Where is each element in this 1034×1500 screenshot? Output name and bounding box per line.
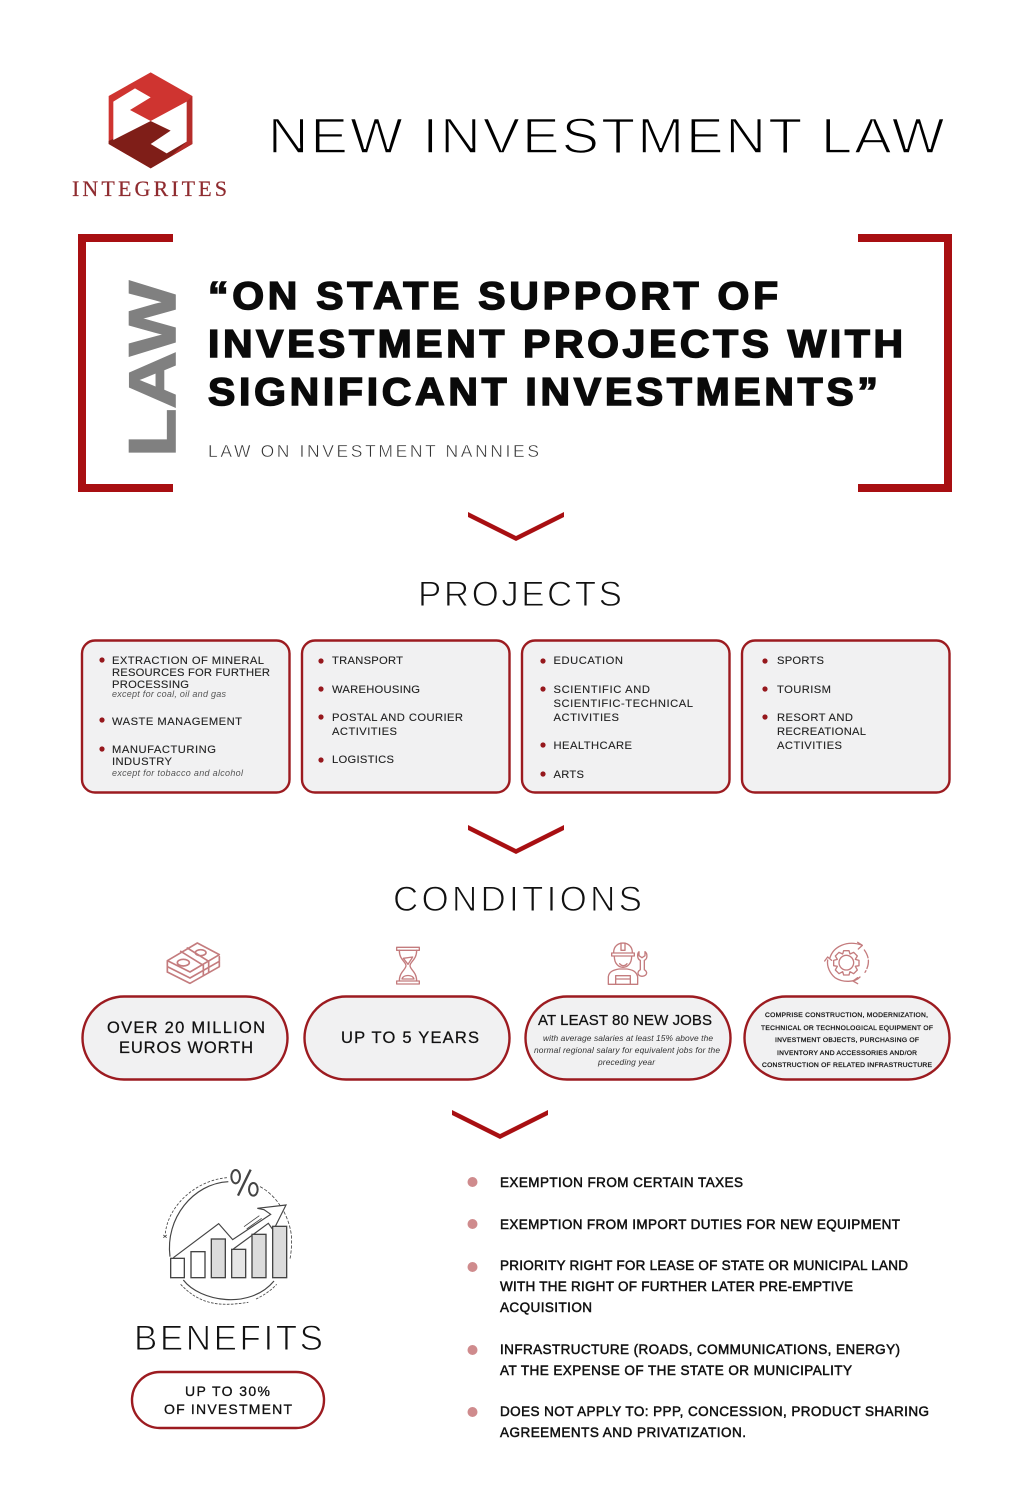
panel: projects card 3: ACTIVITIES xyxy=(554,712,619,724)
arrow: chevron to benefits xyxy=(452,1110,548,1139)
left bracket xyxy=(78,234,173,492)
panel: projects card 2: LOGISTICS xyxy=(332,754,394,766)
heading: conditions: CONDITIONS xyxy=(393,880,642,919)
panel: projects card 4 xyxy=(742,640,950,792)
panel: condition new jobs: normal regional salary for equivalent jobs for the xyxy=(534,1045,720,1055)
panel: projects card 4: TOURISM xyxy=(777,684,831,696)
panel: projects card 2: WAREHOUSING xyxy=(332,684,420,696)
law subtitle: LAW ON INVESTMENT NANNIES xyxy=(208,441,539,461)
panel: projects card 1: WASTE MANAGEMENT xyxy=(112,716,242,728)
panel: condition new jobs xyxy=(526,996,730,1080)
panel: projects card 3 xyxy=(522,640,730,792)
panel: condition duration: UP TO 5 YEARS xyxy=(341,1029,479,1047)
logo wordmark: INTEGRITES xyxy=(72,176,227,201)
panel: projects card 4: RESORT AND xyxy=(777,712,853,724)
panel: projects card 1: INDUSTRY xyxy=(112,756,173,768)
benefit: tax exemption: EXEMPTION FROM CERTAIN TAXES xyxy=(500,1175,743,1190)
law heading xyxy=(208,275,903,414)
heading: benefits: BENEFITS xyxy=(134,1319,323,1358)
benefit: land lease priority: ACQUISITION xyxy=(500,1300,592,1315)
panel: projects card 2: ACTIVITIES xyxy=(332,726,397,738)
panel: condition new jobs: with average salaries at least 15% above the xyxy=(543,1033,713,1043)
panel: condition new jobs: AT LEAST 80 NEW JOBS xyxy=(538,1012,712,1029)
panel: condition investment amount xyxy=(82,996,288,1080)
callout: up to 30 percent xyxy=(132,1372,324,1428)
callout: up to 30 percent: UP TO 30% xyxy=(185,1383,270,1399)
panel: projects card 3: SCIENTIFIC AND xyxy=(554,684,650,696)
title: NEW INVESTMENT LAW xyxy=(268,109,944,164)
benefit: infrastructure xyxy=(468,1342,900,1378)
benefit: import duty exemption: EXEMPTION FROM IMPORT DUTIES FOR NEW EQUIPMENT xyxy=(500,1217,900,1232)
panel: condition investment scope xyxy=(744,996,950,1080)
panel: projects card 4: RECREATIONAL xyxy=(777,726,866,738)
panel: projects card 2: TRANSPORT xyxy=(332,655,403,667)
logo: Integrites xyxy=(72,72,227,201)
panel: condition investment scope: CONSTRUCTION OF RELATED INFRASTRUCTURE xyxy=(762,1062,933,1069)
arrow: chevron to conditions xyxy=(468,825,564,854)
law heading: SIGNIFICANT INVESTMENTS” xyxy=(208,371,878,414)
icon: hourglass xyxy=(397,947,419,984)
benefits list xyxy=(468,1175,929,1440)
icon: worker with wrench xyxy=(608,943,647,984)
panel: projects card 4: SPORTS xyxy=(777,655,824,667)
panel: condition investment scope: INVENTORY AND ACCESSORIES AND/OR xyxy=(777,1050,917,1057)
panel: projects card 1: PROCESSING xyxy=(112,679,189,691)
panel: projects card 3: HEALTHCARE xyxy=(554,740,632,752)
panel: projects card 2 xyxy=(302,640,510,792)
panel: projects card 1: except for tobacco and alcohol xyxy=(112,768,244,778)
benefit: exclusions xyxy=(468,1404,929,1440)
icon: stack of money xyxy=(167,943,219,983)
icon: gear with circular arrows xyxy=(825,942,868,984)
panel: projects card 1: EXTRACTION OF MINERAL xyxy=(112,655,264,667)
panel: condition new jobs: preceding year xyxy=(597,1057,656,1067)
benefit: infrastructure: INFRASTRUCTURE (ROADS, COMMUNICATIONS, ENERGY) xyxy=(500,1342,900,1357)
heading: projects: PROJECTS xyxy=(418,575,622,614)
benefit: land lease priority: WITH THE RIGHT OF FURTHER LATER PRE-EMPTIVE xyxy=(500,1279,853,1294)
benefit: exclusions: AGREEMENTS AND PRIVATIZATION. xyxy=(500,1425,746,1440)
right bracket xyxy=(858,234,952,492)
panel: condition investment scope: COMPRISE CONSTRUCTION, MODERNIZATION, xyxy=(765,1012,928,1019)
benefit: land lease priority: PRIORITY RIGHT FOR LEASE OF STATE OR MUNICIPAL LAND xyxy=(500,1258,908,1273)
panel: projects card 4: ACTIVITIES xyxy=(777,740,842,752)
law heading: INVESTMENT PROJECTS WITH xyxy=(208,323,903,366)
benefit: exclusions: DOES NOT APPLY TO: PPP, CONCESSION, PRODUCT SHARING xyxy=(500,1404,929,1419)
callout: up to 30 percent: OF INVESTMENT xyxy=(164,1401,292,1417)
panel: projects card 3: SCIENTIFIC-TECHNICAL xyxy=(554,698,693,710)
panel: condition duration xyxy=(304,996,510,1080)
panel: law name with brackets xyxy=(78,234,952,492)
panel: condition investment scope: INVESTMENT OBJECTS, PURCHASING OF xyxy=(775,1037,919,1044)
law heading: “ON STATE SUPPORT OF xyxy=(208,275,778,318)
panel: projects card 3: EDUCATION xyxy=(554,655,623,667)
icon: growth chart with percent xyxy=(163,1170,292,1304)
panel: projects card 1: except for coal, oil and gas xyxy=(112,689,226,699)
panel: condition investment scope: TECHNICAL OR TECHNOLOGICAL EQUIPMENT OF xyxy=(761,1025,933,1032)
panel: projects card 2: POSTAL AND COURIER xyxy=(332,712,463,724)
vertical LAW label: LAW xyxy=(116,281,189,457)
panel: condition investment amount: EUROS WORTH xyxy=(119,1039,253,1057)
arrow: chevron to projects xyxy=(468,512,564,541)
icon: hexagon mark xyxy=(109,72,192,168)
panel: projects card 1 xyxy=(82,640,290,792)
benefit: land lease priority xyxy=(468,1258,908,1315)
panel: projects card 1: RESOURCES FOR FURTHER xyxy=(112,667,270,679)
panel: projects card 3: ARTS xyxy=(554,769,584,781)
panel: condition investment amount: OVER 20 MILLION xyxy=(107,1019,265,1037)
panel: projects card 1: MANUFACTURING xyxy=(112,744,216,756)
benefit: infrastructure: AT THE EXPENSE OF THE STATE OR MUNICIPALITY xyxy=(500,1363,852,1378)
